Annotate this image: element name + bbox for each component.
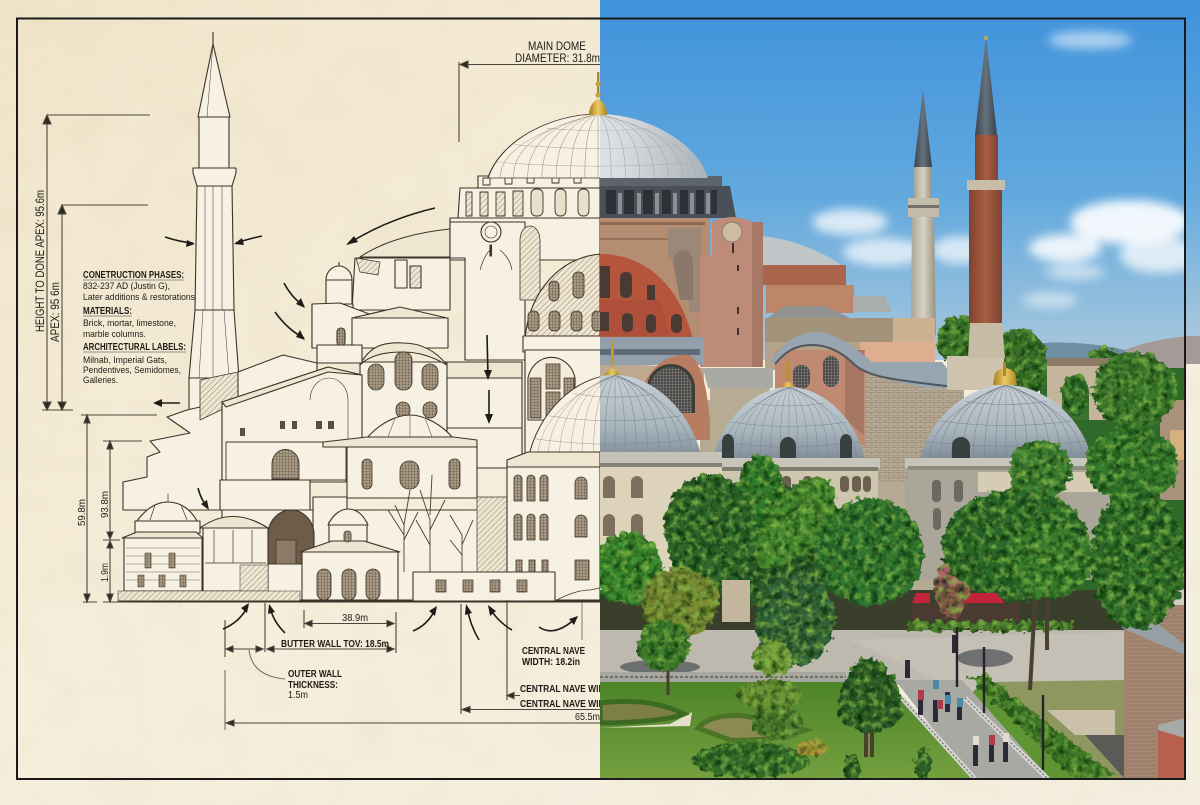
lime-green foreground tree [692, 640, 931, 783]
curved annotation arrows [153, 208, 578, 640]
later additions line: Later additions & restorations [83, 292, 195, 303]
label: central nave width [522, 646, 585, 668]
label: apex height: APEX: 95 6m [50, 282, 62, 342]
plaza [600, 630, 1124, 692]
railing [600, 672, 846, 682]
sketched main dome [488, 114, 708, 178]
dates line: 832-237 AD (Justin G), [83, 281, 170, 292]
far-right gate building [1047, 358, 1190, 500]
background trees [936, 316, 1121, 401]
conical clipped tree [838, 657, 902, 731]
tree: upper right pair [1061, 352, 1178, 503]
flower beds with hedges [600, 701, 805, 744]
stone building between trees [722, 580, 750, 622]
front lead dome and drum [600, 340, 722, 590]
tree: left of front drum [594, 532, 662, 604]
buttress wall dimension [225, 603, 394, 657]
labels line 3: Galleries. [83, 375, 118, 386]
label: 65.5m: 65.5m [575, 712, 600, 723]
sketched left domed pavilion [122, 494, 203, 591]
sketched gabled porch [200, 516, 268, 591]
tree: light crown centre [754, 477, 835, 568]
label: outer wall thickness [288, 669, 342, 701]
main dome diameter label [515, 39, 600, 65]
sketched dark arched entry [268, 510, 314, 564]
label: buttress wall: BUTTER WALL TOV: 18.5m [281, 639, 389, 650]
height dimension: apex alternate [58, 205, 148, 410]
materials line 2: marble columns. [83, 329, 146, 340]
right sketch scribbles by ground [555, 588, 600, 640]
tree: flowering pink [934, 562, 970, 618]
sketched minaret [189, 32, 239, 430]
sketched side blocks [312, 303, 448, 348]
sketched front domed kiosk [300, 509, 400, 600]
right buttress with medallion [700, 217, 763, 367]
main dome drum [600, 176, 736, 218]
label: central nave width: WIDTH: 18.2in [522, 657, 580, 668]
labels line 2: Pendentives, Semidomes, [83, 365, 181, 376]
labels line 1: Milnab, Imperial Gats, [83, 355, 167, 366]
sketched low front wall with panels [413, 572, 555, 601]
sketched central pier with medallion [450, 218, 600, 360]
tree: broad crown right of centre [816, 498, 924, 606]
gold finial on main dome [589, 72, 607, 115]
sketched triple arched window bay [525, 350, 605, 462]
photo panel: Hagia Sophia colour photograph [600, 0, 1184, 778]
heading underline strokes [83, 280, 186, 352]
sketched small central dome with block [323, 415, 477, 498]
label: central nave width, cut off: CENTRAL NAVE WIDTH [520, 684, 616, 695]
tree: olive round [641, 568, 719, 636]
sketched front wall of lower storey [222, 497, 510, 600]
tree trunks [668, 600, 1047, 757]
red market umbrellas [912, 593, 1005, 603]
dimension lines and annotation arrows [42, 61, 600, 730]
label: height to dome apex: HEIGHT TO DONE APEX: 95.6m [35, 190, 47, 332]
sky strip beyond the right border [1184, 0, 1200, 364]
heading: architectural labels: ARCHITECTURAL LABELS: [83, 342, 186, 353]
right minaret [967, 36, 1005, 323]
stone backdrop behind domes and trees [700, 400, 1110, 600]
tree: big central right [942, 440, 1092, 601]
central nave dimensions [461, 600, 600, 714]
visitors on the footpath [905, 635, 1009, 766]
green mass at far right behind buildings [1040, 368, 1184, 590]
sketched ground line [118, 591, 600, 602]
label: 59.8m: 59.8m [77, 499, 88, 526]
weeping tree [638, 619, 690, 671]
main dome diameter label: DIAMETER: 31.8m [515, 51, 600, 65]
main dome diameter label: MAIN DOME [528, 39, 586, 53]
tree: lower right [1090, 490, 1186, 630]
bottom dimension labels [281, 613, 616, 723]
height dimension: 59.8m [81, 415, 157, 602]
vertical height labels [35, 190, 111, 582]
label: 1.9m: 1.9m [100, 563, 111, 582]
dense foliage mass behind the central trees [594, 483, 855, 607]
right minaret base [947, 322, 1005, 390]
heading: materials: MATERIALS: [83, 306, 132, 317]
label: central nave width: CENTRAL NAVE [522, 646, 585, 657]
label: outer wall thickness: THICKNESS: [288, 680, 338, 691]
materials line 1: Brick, mortar, limestone, [83, 318, 176, 329]
lawn [600, 680, 1150, 779]
sketched low vault roof strip [238, 345, 362, 398]
sky with clouds [600, 0, 1200, 360]
outer wall leader and total width [225, 650, 600, 730]
tree: tall crown centre [736, 455, 784, 535]
sketched rear semidome and wall [326, 229, 450, 310]
label: 93.8m: 93.8m [100, 491, 111, 518]
sketched main dome drum [458, 176, 600, 218]
text block: construction phases, materials, labels [83, 270, 195, 386]
label: outer wall thickness: 1.5m [288, 690, 308, 701]
tree: broad crown left centre [664, 474, 756, 586]
heading: construction phases: CONETRUCTION PHASES: [83, 270, 184, 281]
label: 38.9m: 38.9m [342, 613, 368, 624]
main dome, photo half [600, 114, 708, 178]
sketched great arch with semidome windows [523, 254, 603, 352]
sketched front dome and drum [507, 375, 702, 600]
main dome diameter line [459, 61, 600, 142]
footpath with railings [895, 680, 1050, 779]
middle minaret [908, 90, 939, 335]
slate roof and lower arched bay [600, 337, 773, 448]
brick building lower right [1122, 565, 1185, 779]
trimmed hedges [908, 621, 1115, 779]
sketched rear mass [123, 372, 238, 510]
height dimension: dome apex [42, 115, 150, 410]
sketched bare trees [388, 475, 473, 572]
label: outer wall thickness: OUTER WALL [288, 669, 342, 680]
sketched long-roof wing [220, 367, 362, 510]
right lead dome [905, 362, 1098, 530]
tree: pine [755, 574, 835, 666]
sketch panel: pencil elevation of the building [118, 32, 708, 640]
label: central nave width, cut off, second: CENTRAL NAVE WIDTH [520, 699, 616, 710]
great arch wall and red semidome [600, 218, 710, 343]
middle lead dome [712, 362, 880, 510]
38.9m dimension [304, 610, 396, 653]
sketched arched bay under vault [360, 343, 450, 442]
sketched rectangular block with down arrows area [447, 362, 522, 468]
distant hills and city [1042, 336, 1184, 368]
shaded shop band behind garden [600, 590, 1125, 632]
large stone wall with pink arch and curved lead roof [770, 332, 964, 482]
height dimension: 93.8m and 1.9m [103, 441, 142, 602]
lamp posts [957, 627, 1043, 770]
back dome and upper walls [760, 236, 935, 370]
